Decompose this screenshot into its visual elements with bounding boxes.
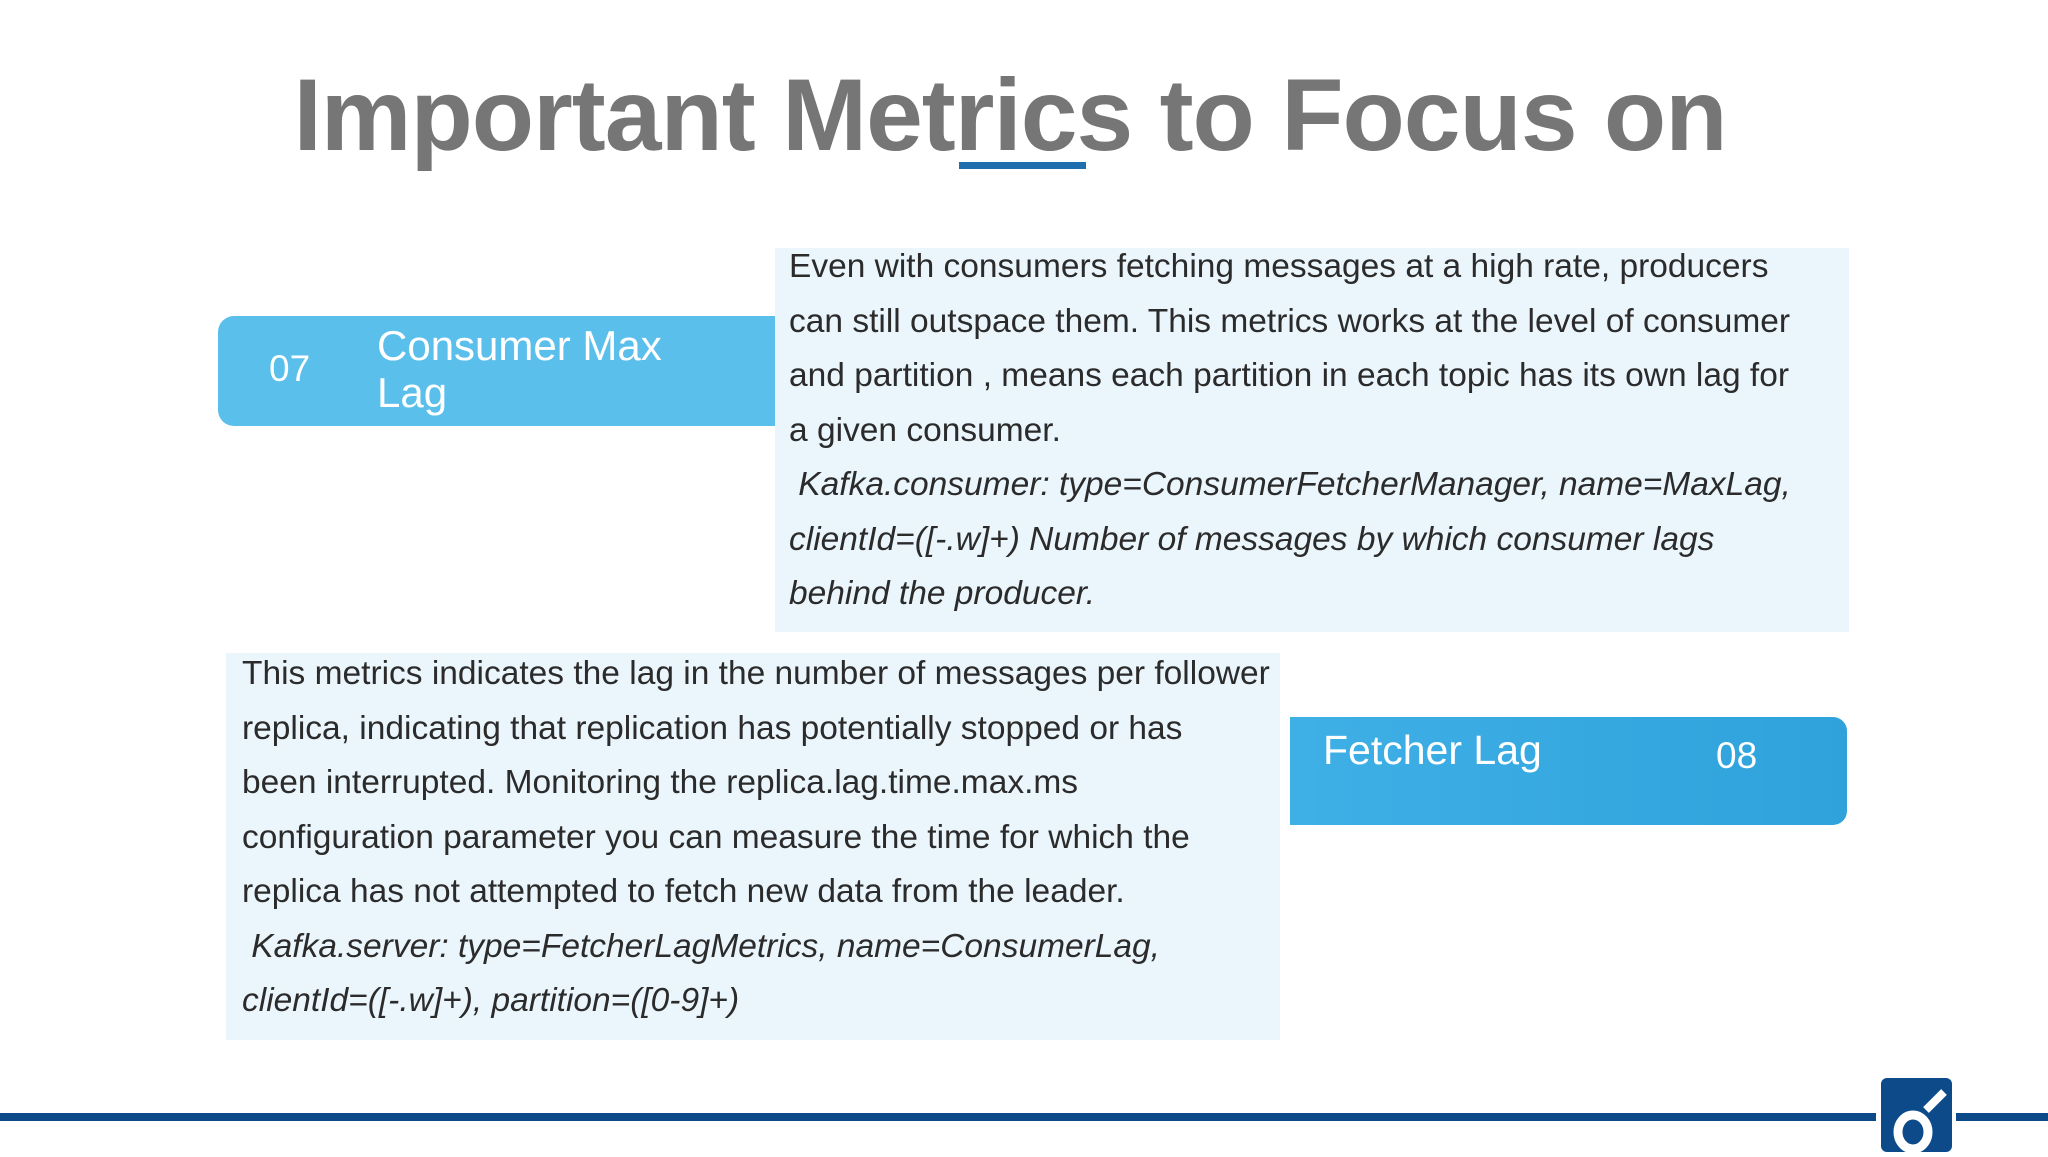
text block: and partition , means each partition in each topic has its own lag for [789,357,1789,394]
heading: Fetcher Lag: Fetcher Lag [1323,727,1542,773]
number 08: 08 [1716,735,1757,776]
text block: This metrics indicates the lag in the number of messages per follower [242,655,1270,692]
text block [789,248,1791,612]
text block: replica has not attempted to fetch new data from the leader. [242,873,1125,910]
panel: consumer max lag description [775,248,1849,632]
text block: a given consumer. [789,412,1061,448]
bar: Fetcher Lag 08 [1290,717,1847,825]
panel: fetcher lag description [226,653,1280,1040]
heading: Consumer Max Lag: Consumer Max [377,322,662,369]
text block: replica, indicating that replication has potentially stopped or has [242,710,1182,746]
text block: behind the producer. [789,575,1095,612]
text block: can still outspace them. This metrics works at the level of consumer [789,302,1790,340]
icon: logo [1876,1070,1956,1152]
heading: Consumer Max Lag: Lag [377,369,447,416]
number 07: 07 [269,348,310,389]
text block: Even with consumers fetching messages at a high rate, producers [789,248,1768,285]
title underline [959,162,1086,169]
heading: Consumer Max Lag [377,322,662,416]
text block: been interrupted. Monitoring the replica.lag.time.max.ms [242,764,1078,801]
text block [242,655,1270,1019]
text block: Kafka.server: type=FetcherLagMetrics, name=ConsumerLag, [251,928,1160,964]
text block: clientId=([-.w]+), partition=([0-9]+) [242,982,739,1019]
bar: 07 Consumer Max Lag [218,316,775,426]
bottom line [0,1113,2048,1121]
text block: Kafka.consumer: type=ConsumerFetcherManager, name=MaxLag, [798,466,1791,503]
text block: configuration parameter you can measure the time for which the [242,818,1190,856]
text block: clientId=([-.w]+) Number of messages by which consumer lags [789,520,1714,558]
title: Important Metrics to Focus on [293,58,1727,172]
